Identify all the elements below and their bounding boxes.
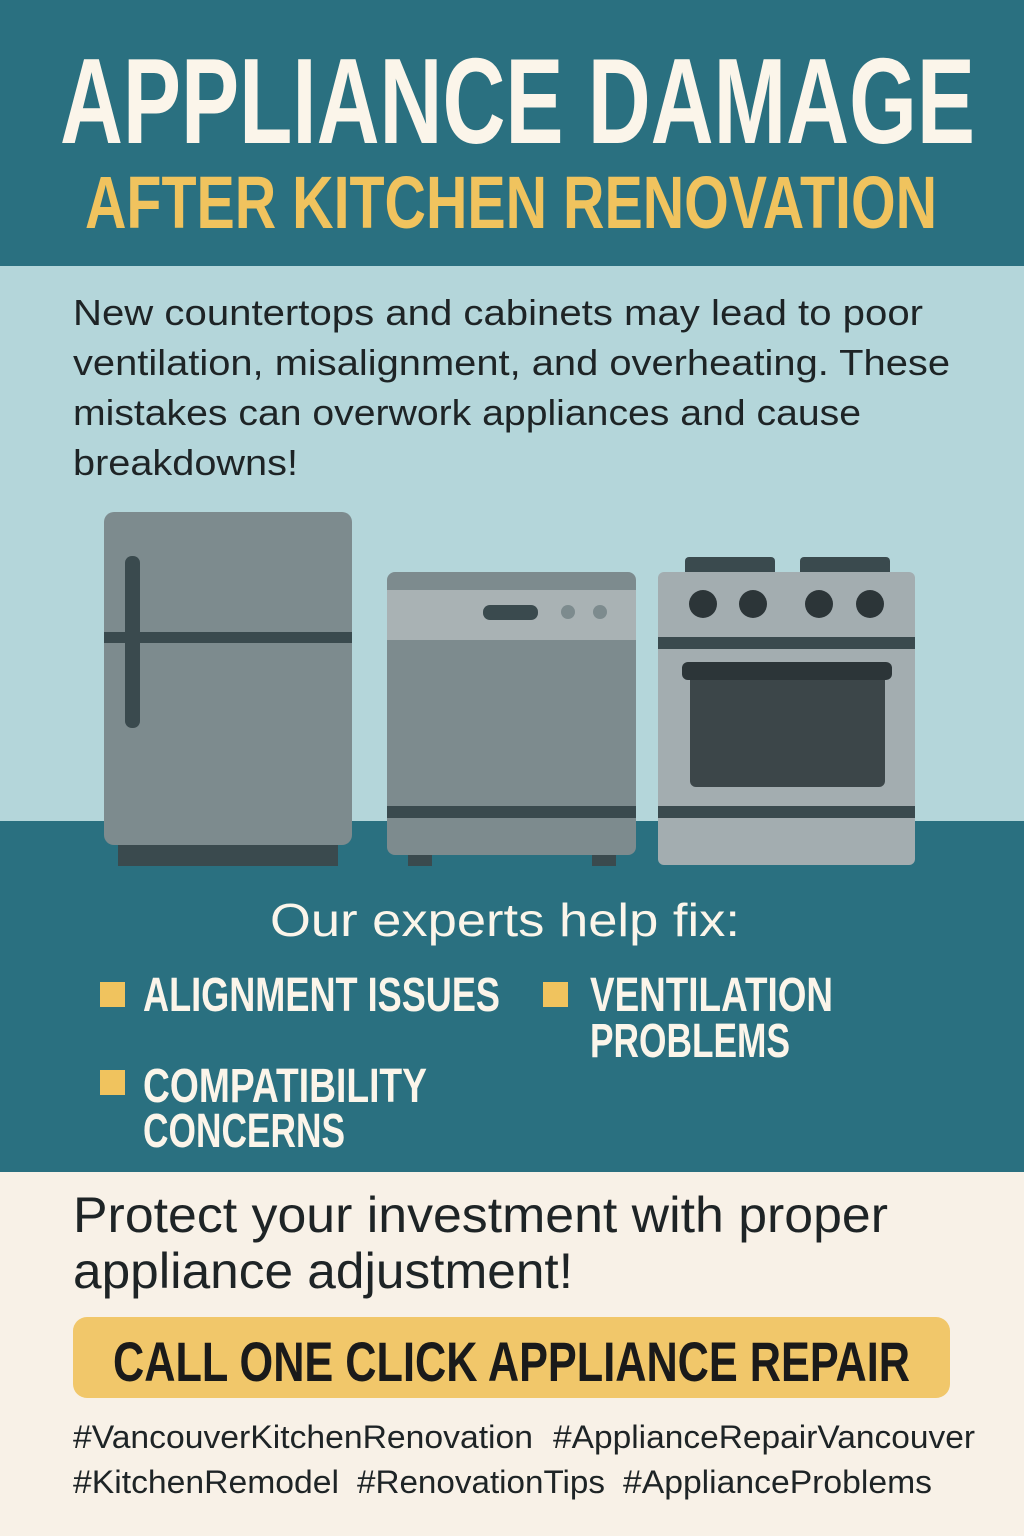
intro paragraph: mistakes can overwork appliances and cause bbox=[73, 392, 861, 433]
protect message bbox=[73, 1187, 888, 1299]
item: ventilation: PROBLEMS bbox=[590, 1015, 790, 1068]
item: compatibility bbox=[100, 1060, 427, 1158]
item: compatibility: CONCERNS bbox=[143, 1105, 345, 1158]
icon: refrigerator bbox=[104, 512, 352, 866]
icon: stove bbox=[658, 557, 915, 865]
hashtags: #ApplianceProblems bbox=[623, 1464, 932, 1500]
item: ventilation: VENTILATION bbox=[590, 969, 833, 1022]
experts heading: Our experts help fix: bbox=[270, 894, 740, 946]
list of fixes bbox=[100, 969, 833, 1158]
hashtags: #RenovationTips bbox=[357, 1464, 605, 1500]
item: alignment bbox=[100, 969, 500, 1022]
hashtags bbox=[73, 1419, 975, 1500]
intro paragraph: breakdowns! bbox=[73, 442, 298, 483]
intro paragraph: New countertops and cabinets may lead to poor bbox=[73, 292, 923, 333]
hashtags: #KitchenRemodel bbox=[73, 1464, 339, 1500]
item: ventilation bbox=[543, 969, 833, 1068]
hashtags: #VancouverKitchenRenovation bbox=[73, 1419, 533, 1455]
protect message: appliance adjustment! bbox=[73, 1243, 573, 1299]
hashtags: #ApplianceRepairVancouver bbox=[553, 1419, 975, 1455]
intro paragraph bbox=[73, 292, 950, 483]
icon: dishwasher bbox=[387, 572, 636, 866]
protect message: Protect your investment with proper bbox=[73, 1187, 888, 1243]
call to action button bbox=[73, 1317, 950, 1398]
title bbox=[60, 33, 975, 244]
item: alignment: ALIGNMENT ISSUES bbox=[143, 969, 500, 1022]
item: compatibility: COMPATIBILITY bbox=[143, 1060, 427, 1113]
intro paragraph: ventilation, misalignment, and overheating. These bbox=[73, 342, 950, 383]
